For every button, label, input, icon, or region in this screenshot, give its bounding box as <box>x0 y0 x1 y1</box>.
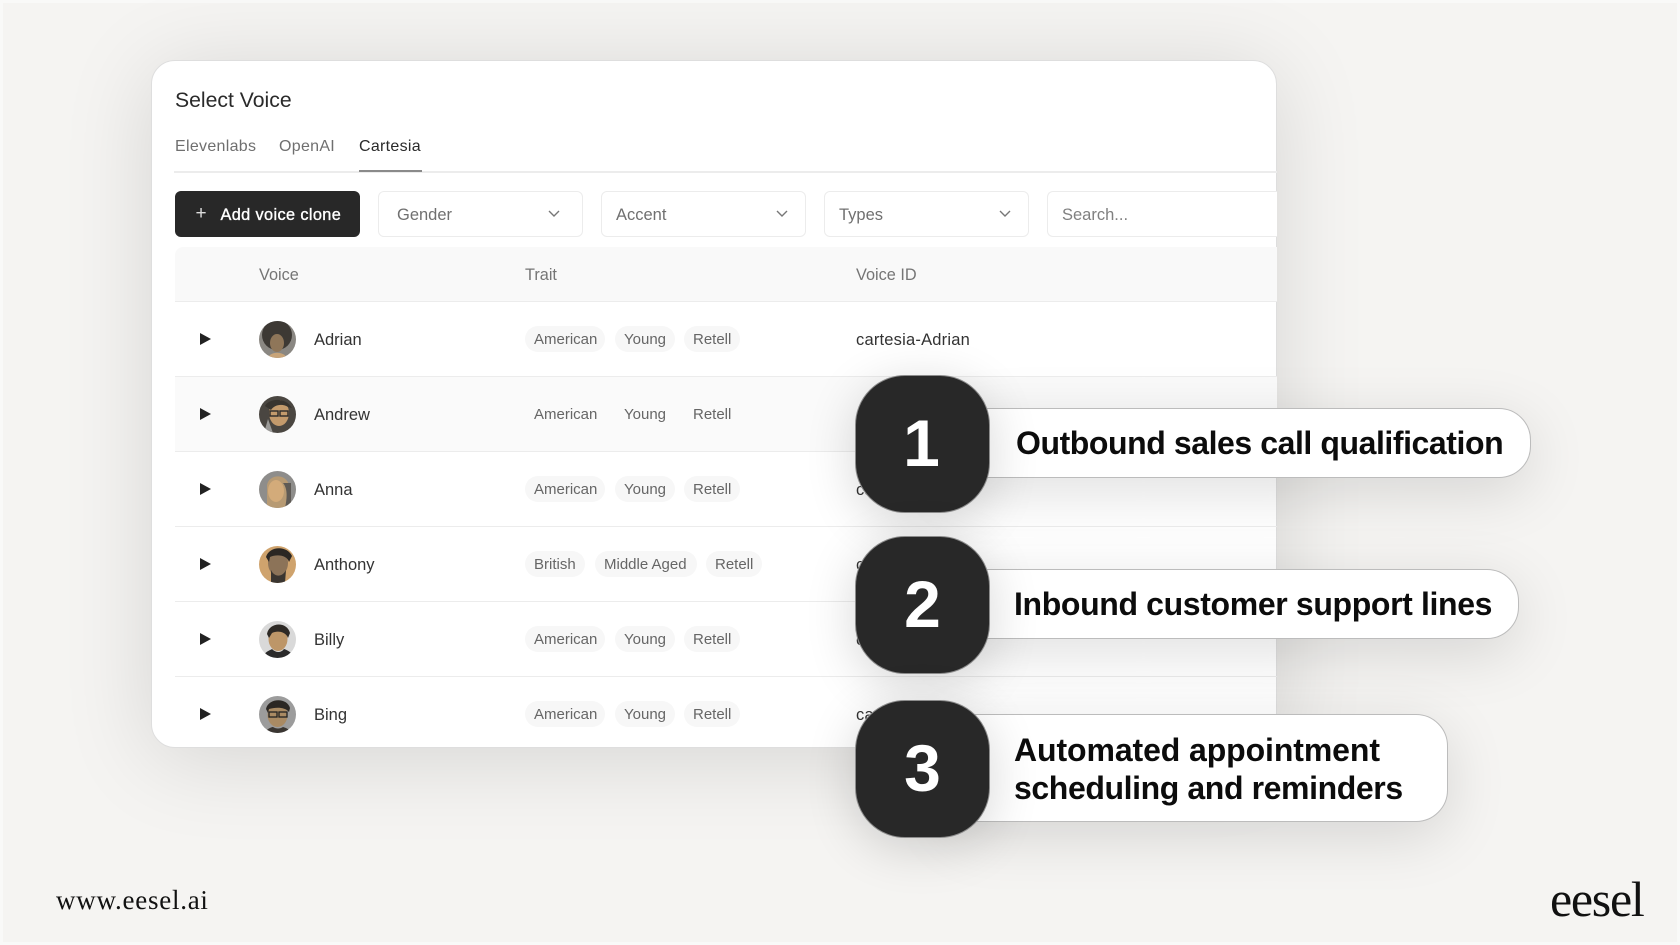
filter: gender <box>378 191 583 237</box>
number badge 1: 1 <box>903 406 940 480</box>
chip: British <box>525 551 585 577</box>
search input <box>1047 191 1277 237</box>
row: Adrian <box>175 301 1277 358</box>
chip: Retell: Retell <box>693 480 731 498</box>
column: voice id: Voice ID <box>856 266 917 284</box>
number badge 2 <box>855 536 990 674</box>
tab: Cartesia active: Cartesia <box>359 138 421 155</box>
chip: American <box>525 701 605 727</box>
chip: Retell <box>706 551 762 577</box>
filter: gender: Gender <box>397 206 452 224</box>
chip: Retell: Retell <box>693 406 731 422</box>
row: Bing <box>175 676 1277 733</box>
chip: Young: Young <box>624 630 666 648</box>
pill: callout 2 <box>945 569 1519 639</box>
chip: Retell: Retell <box>693 630 731 648</box>
tabs <box>174 136 1277 173</box>
label: appointment scheduling: scheduling and reminders <box>1014 770 1403 806</box>
chip: American: American <box>534 480 597 498</box>
name: Bing <box>314 706 347 724</box>
filter: types: Types <box>839 206 883 224</box>
avatar: Billy <box>259 621 296 658</box>
chip: Middle Aged: Middle Aged <box>604 556 687 572</box>
chip: Young <box>615 476 675 502</box>
label: appointment scheduling: Automated appointment <box>1014 732 1380 768</box>
chip: American: American <box>534 630 597 648</box>
chip: American: American <box>534 330 597 348</box>
label: outbound sales: Outbound sales call qualification <box>1016 425 1503 461</box>
chip: American <box>525 626 605 652</box>
callout 2 <box>837 528 1526 700</box>
icon: play <box>200 483 211 495</box>
chip: Young: Young <box>624 330 666 348</box>
name: Adrian <box>314 331 362 349</box>
avatar: Andrew <box>259 396 296 433</box>
chip: American: American <box>534 406 597 422</box>
active tab underline <box>359 170 422 172</box>
chip: Young: Young <box>624 706 666 722</box>
chip: Young <box>615 326 675 352</box>
chip: Young <box>615 701 675 727</box>
button label: Add voice clone <box>220 206 341 224</box>
filter: types <box>824 191 1029 237</box>
column: trait: Trait <box>525 266 557 284</box>
search input: Search... <box>1062 206 1128 224</box>
number badge 1 <box>855 375 990 513</box>
callout 3 <box>837 690 1464 868</box>
tab: OpenAI: OpenAI <box>279 138 335 155</box>
name: Anthony <box>314 556 375 574</box>
button: add voice clone <box>174 191 360 237</box>
row: Anna <box>175 451 866 508</box>
chip: Retell <box>684 476 740 502</box>
name: Andrew <box>314 406 370 424</box>
chip: Young: Young <box>624 406 666 422</box>
filter: accent <box>601 191 806 237</box>
logo: eesel: eesel <box>1550 871 1643 927</box>
number badge 3 <box>855 700 990 838</box>
tab: Elevenlabs: Elevenlabs <box>175 138 256 155</box>
row: Anthony <box>175 526 1277 583</box>
number badge 3: 3 <box>904 731 941 805</box>
chip: Retell <box>684 701 740 727</box>
number badge 2: 2 <box>904 567 941 641</box>
name: Billy <box>314 631 344 649</box>
name: Anna <box>314 481 353 499</box>
chip: Young <box>615 626 675 652</box>
icon: play <box>200 708 211 720</box>
callout 1 <box>837 367 1538 538</box>
chip: Retell <box>684 326 740 352</box>
icon: play <box>200 558 211 570</box>
chip: Middle Aged <box>595 551 697 577</box>
chip: Retell: Retell <box>715 556 753 572</box>
title: Select Voice <box>175 89 292 112</box>
chip: American <box>525 326 605 352</box>
label: appointment scheduling <box>1014 732 1403 806</box>
avatar: Anna <box>259 471 296 508</box>
pill: callout 1 <box>945 408 1531 478</box>
column: voice: Voice <box>259 266 299 284</box>
avatar: Bing <box>259 696 296 733</box>
icon: plus: + <box>196 203 207 224</box>
row: Andrew <box>175 376 1277 433</box>
filter: accent: Accent <box>616 206 666 224</box>
chip: American: American <box>534 706 597 722</box>
row: Billy <box>175 601 860 658</box>
icon: play <box>200 408 211 420</box>
table header <box>175 247 1277 301</box>
chip: American <box>525 476 605 502</box>
panel: select voice card <box>151 60 1277 748</box>
chip: Retell: Retell <box>693 706 731 722</box>
icon: play <box>200 633 211 645</box>
footer url: www.eesel.ai <box>56 885 209 915</box>
icon: play <box>200 333 211 345</box>
chip: Retell: Retell <box>693 330 731 348</box>
avatar: Anthony <box>259 546 296 583</box>
chip: Young: Young <box>624 480 666 498</box>
avatar: Adrian <box>259 321 296 358</box>
chip: British: British <box>534 556 576 572</box>
chip: Retell <box>684 626 740 652</box>
label: inbound support: Inbound customer support lines <box>1014 586 1492 622</box>
pill: callout 3 <box>945 714 1448 822</box>
